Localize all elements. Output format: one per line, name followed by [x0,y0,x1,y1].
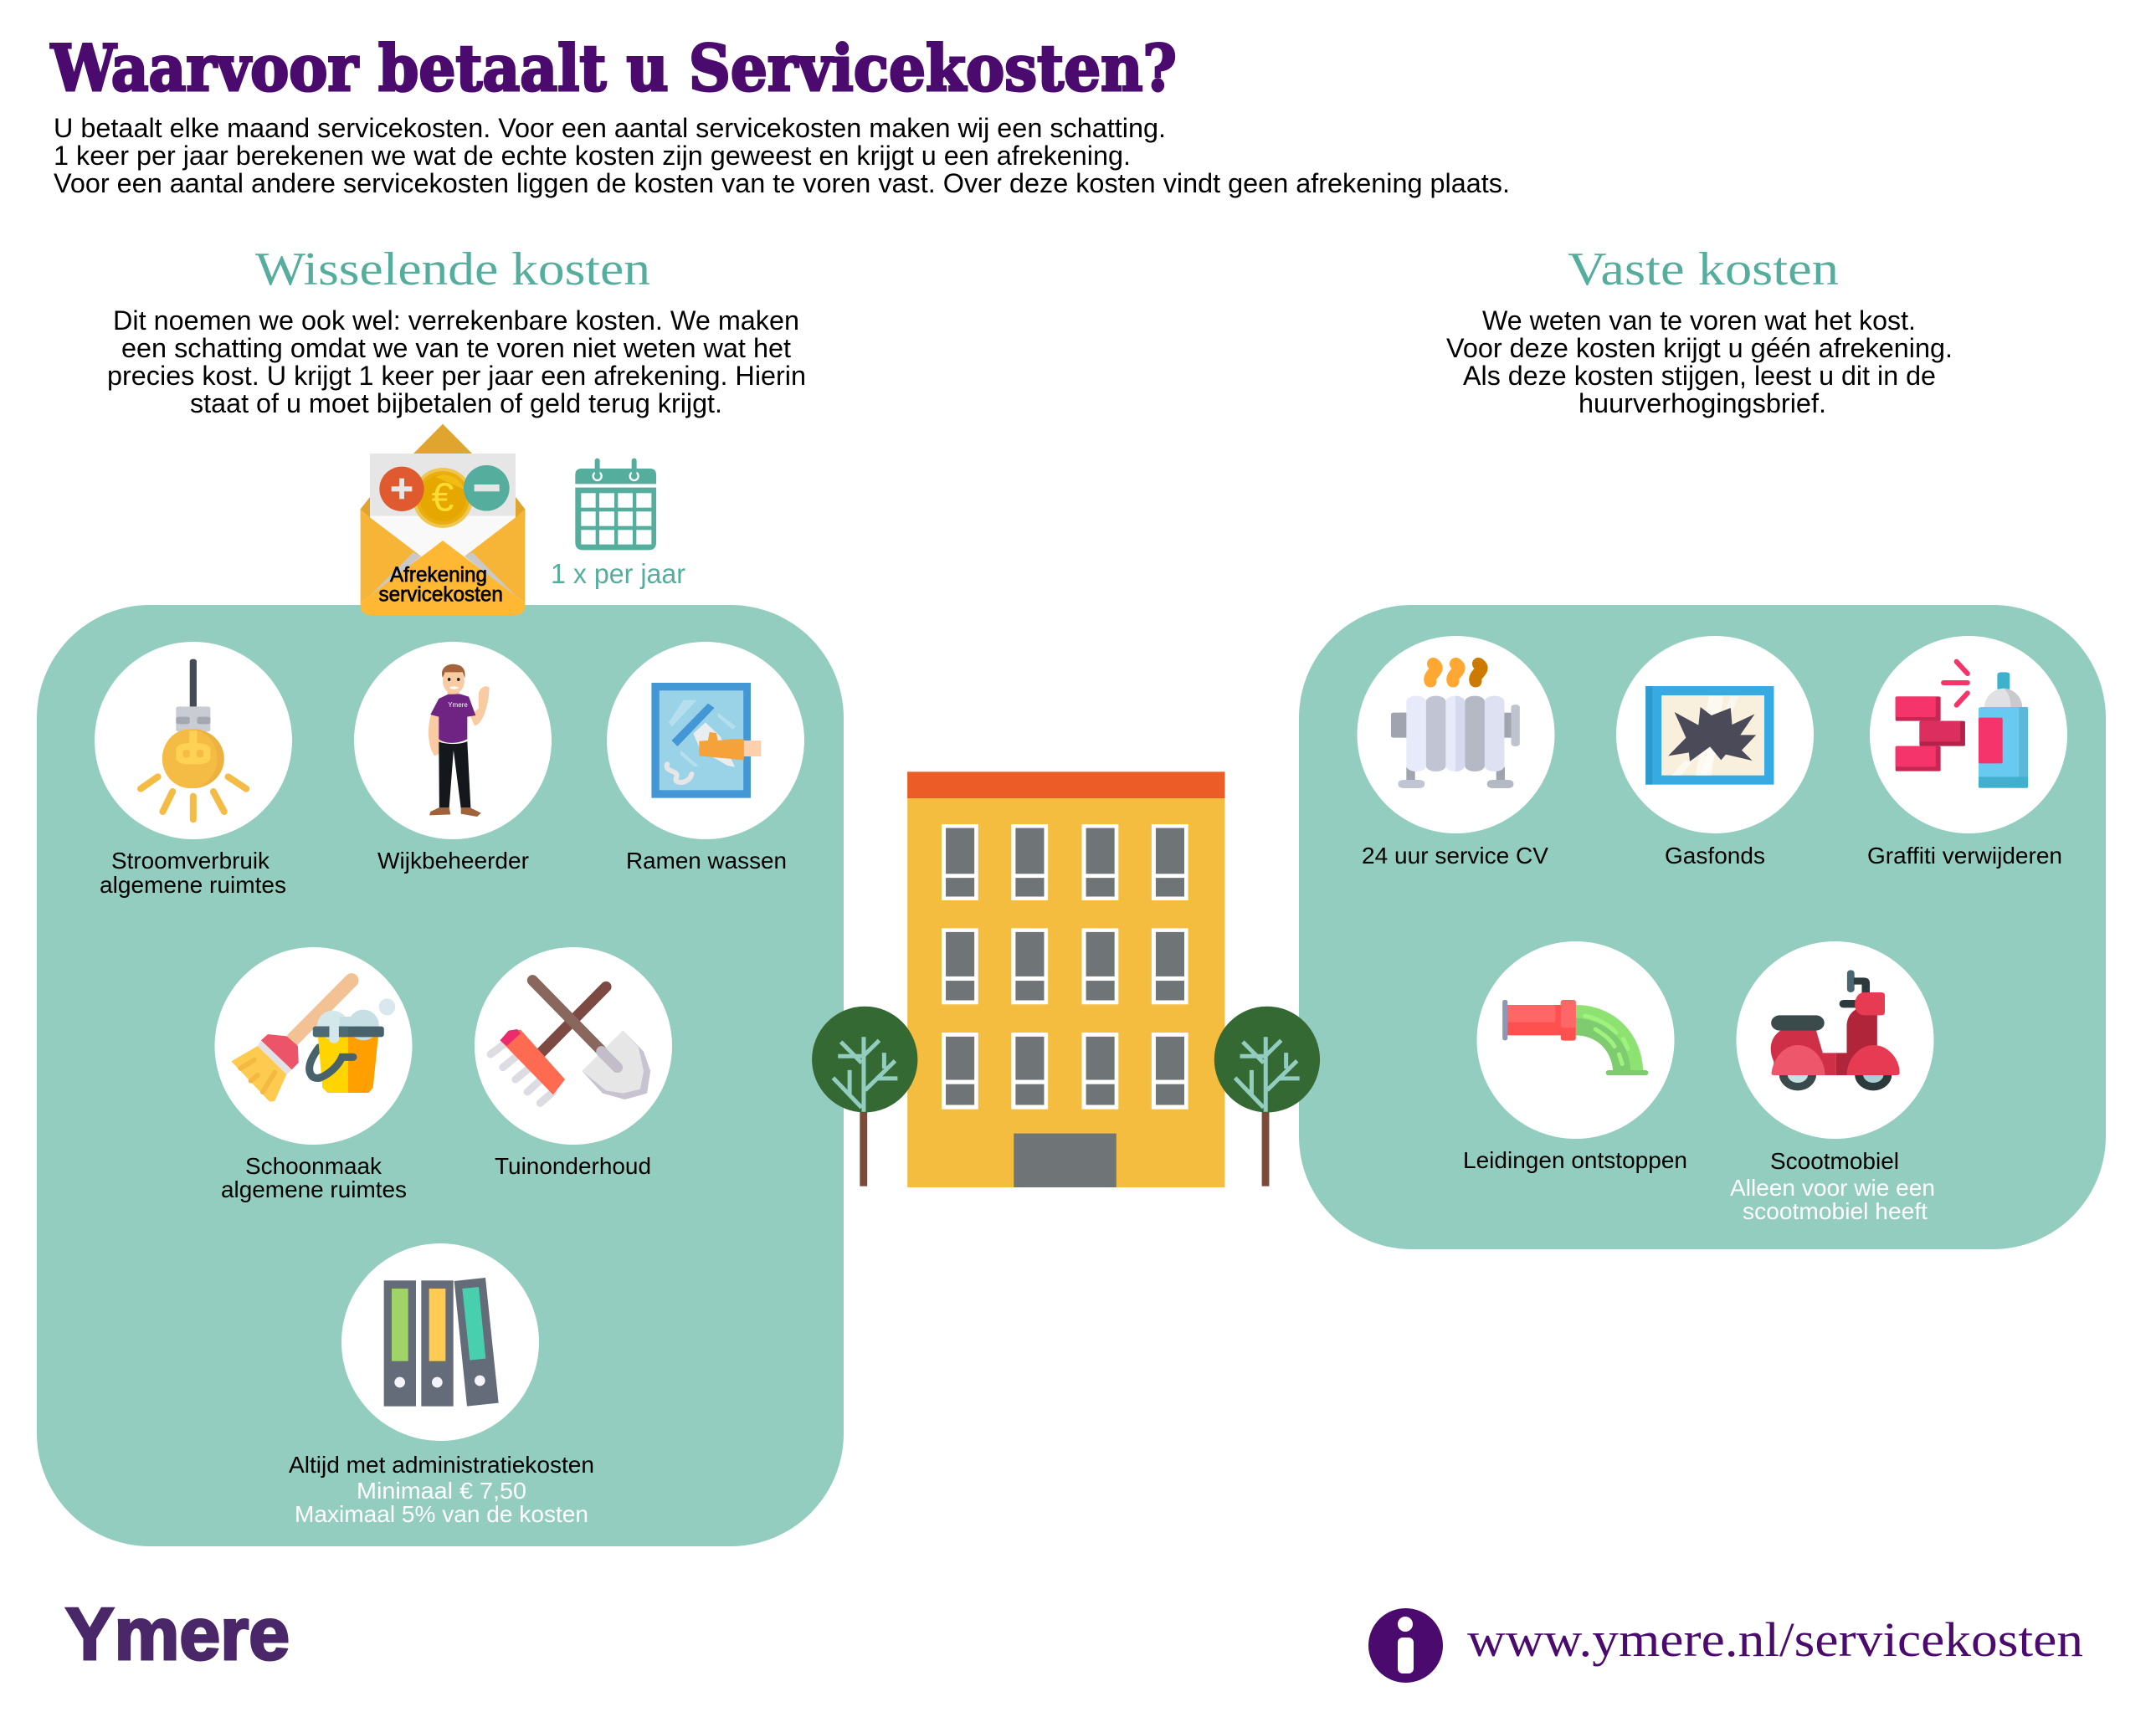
logo on shirt: Ymere [448,701,468,709]
text block: wisselende kosten: Dit noemen we ook wel: verrekenbare kosten. We maken [113,305,799,336]
building [907,771,1224,1187]
label: Tuinonderhoud [495,1153,651,1179]
item: leidingen ontstoppen [1463,941,1687,1173]
label: algemene ruimtes [221,1176,407,1202]
circle [1616,636,1814,833]
circle [1476,941,1674,1139]
label [1730,1148,1935,1224]
label: Graffiti verwijderen [1867,843,2062,869]
icon: window cleaning [651,683,761,798]
panel: vaste kosten [1299,605,2106,1249]
label: Scootmobiel [1770,1148,1899,1174]
intro text [54,113,1510,198]
item: administratiekosten [289,1243,594,1527]
label [289,1452,594,1527]
heading: Vaste kosten: Vaste kosten [1568,243,1839,295]
intro text: 1 keer per jaar berekenen we wat de echte kosten zijn geweest en krijgt u een afrekening. [54,141,1131,171]
intro text: U betaalt elke maand servicekosten. Voor een aantal servicekosten maken wij een schatting. [54,113,1166,143]
icon: spray can and bricks [1896,662,2028,788]
text block: wisselende kosten: een schatting omdat we van te voren niet weten wat het [121,333,791,363]
footer link text: www.ymere.nl/servicekosten [1467,1612,2083,1667]
icon: envelope afrekening: € [432,475,454,520]
icon: envelope afrekening: servicekosten [378,582,503,606]
item: scootmobiel [1730,941,1935,1224]
intro text: Voor een aantal andere servicekosten liggen de kosten van te voren vast. Over deze kosten vindt geen afrekening plaats. [54,168,1510,198]
circle [1358,636,1555,833]
roof [907,771,1224,798]
label: scootmobiel heeft [1743,1198,1928,1224]
tree right [1214,1007,1320,1187]
circle [1736,941,1933,1139]
text block: vaste kosten: huurverhogingsbrief. [1578,388,1826,418]
title: Waarvoor betaalt u Servicekosten? [50,31,1177,105]
panel: wisselende kosten [37,605,844,1546]
icon: info [1368,1608,1443,1683]
logo: Ymere: Ymere [65,1592,290,1675]
tree left [812,1007,917,1187]
item: ramen wassen [607,642,804,874]
icon: light bulb [141,659,246,819]
text block: vaste kosten [1446,305,1953,418]
label: Leidingen ontstoppen [1463,1147,1687,1173]
label: Ramen wassen [626,848,787,874]
label: 1 x per jaar: 1 x per jaar [551,558,685,589]
text block: vaste kosten: Als deze kosten stijgen, leest u dit in de [1463,361,1936,391]
icon: binders [384,1278,499,1407]
circle [1870,636,2067,833]
heading: Wisselende kosten: Wisselende kosten [255,243,650,295]
icon: broom and bucket [231,981,395,1102]
item: stroomverbruik [95,642,292,898]
icon: man [429,664,490,817]
circle [341,1243,539,1441]
text block: wisselende kosten: staat of u moet bijbetalen of geld terug krijgt. [190,388,722,418]
item: graffiti verwijderen [1867,636,2067,869]
item: 24 uur service CV [1358,636,1555,869]
label: Gasfonds [1665,843,1765,869]
circle [95,642,292,839]
label: 24 uur service CV [1362,843,1548,869]
icon: radiator [1391,664,1520,788]
text block: vaste kosten: Voor deze kosten krijgt u géén afrekening. [1446,333,1953,363]
label: Altijd met administratiekosten [289,1452,594,1478]
circle [354,642,552,839]
text block: vaste kosten: We weten van te voren wat het kost. [1482,305,1916,336]
icon: envelope afrekening [361,424,525,615]
icon: rake and shovel [490,981,650,1103]
label: Alleen voor wie een [1730,1175,1935,1201]
label: algemene ruimtes [100,872,286,898]
circle [214,947,412,1145]
item: tuinonderhoud [475,947,672,1179]
icon: broken window [1645,686,1774,785]
label: Minimaal € 7,50 [357,1478,526,1504]
label: Maximaal 5% van de kosten [295,1501,588,1527]
icon: calendar [575,459,656,550]
text block: wisselende kosten [107,305,806,418]
label: Stroomverbruik [111,848,270,874]
text block: wisselende kosten: precies kost. U krijgt 1 keer per jaar een afrekening. Hierin [107,361,806,391]
label [221,1153,407,1202]
icon: pipe [1502,1000,1648,1075]
circle [475,947,672,1145]
item: gasfonds [1616,636,1814,869]
label: Wijkbeheerder [377,848,529,874]
windows [942,824,1188,1110]
icon: envelope afrekening: Afrekening [390,563,487,587]
item: schoonmaak [214,947,412,1202]
circle [607,642,804,839]
label [100,848,286,898]
label: Schoonmaak [245,1153,382,1179]
icon: scooter [1771,970,1900,1090]
door [1014,1134,1116,1187]
item: wijkbeheerder [354,642,552,874]
